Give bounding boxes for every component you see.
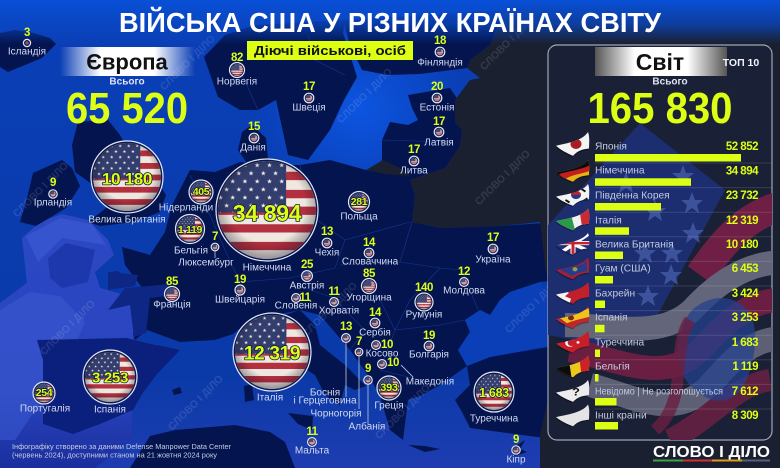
World heading: Світ	[636, 49, 684, 75]
flag: Bahrain	[556, 282, 590, 305]
row: United Kingdom	[554, 231, 758, 259]
row: South Korea	[554, 182, 758, 210]
country: Spain: 3 253	[92, 370, 128, 386]
map: Russia and Belarus dark region	[410, 0, 780, 468]
country: United Kingdom	[88, 141, 166, 226]
row: Unknown: Невідомо | Не розголошується	[595, 386, 723, 398]
World label: Всього	[652, 76, 688, 88]
country: Norway	[217, 52, 257, 88]
country: Bosnia and Herzegovina: 13	[340, 321, 352, 333]
country: Denmark	[240, 121, 266, 154]
country: Austria: 25	[301, 259, 314, 271]
land: Sicily	[288, 413, 313, 430]
country: Portugal: Португалія	[20, 404, 70, 414]
country: Cyprus: 9	[513, 434, 519, 446]
country: Slovenia: Словенія	[275, 300, 317, 312]
panel flag backdrop	[548, 123, 780, 440]
country: Slovakia: 14	[363, 237, 376, 249]
row: Other countries	[556, 404, 758, 430]
country: Estonia: 20	[431, 81, 443, 93]
watermarks: СЛОВО І ДІЛО	[158, 33, 218, 93]
country: Finland: Фінляндія	[417, 58, 463, 68]
row: Japan: Японія	[595, 142, 627, 152]
country: Montenegro	[310, 336, 363, 420]
country: Iceland	[8, 27, 46, 58]
watermarks: СЛОВО І ДІЛО	[11, 160, 71, 220]
country: France	[153, 276, 191, 310]
country: Cyprus	[506, 434, 526, 466]
World number: 165 830	[588, 84, 732, 133]
watermarks: СЛОВО І ДІЛО	[335, 66, 395, 126]
row: Belgium: 1 119	[732, 361, 758, 373]
country: Ireland: 9	[50, 177, 56, 189]
country: Slovakia: Словаччина	[342, 256, 399, 268]
land: North Africa	[130, 425, 295, 468]
country: Czechia: Чехія	[315, 248, 339, 258]
rifle silhouette	[108, 271, 170, 337]
country: Latvia	[424, 116, 454, 148]
flag: Unknown	[556, 380, 589, 403]
country: Spain: Іспанія	[94, 404, 126, 416]
watermarks: СЛОВО І ДІЛО	[373, 382, 433, 442]
watermarks: СЛОВО І ДІЛО	[473, 148, 533, 208]
land: central Europe	[122, 160, 560, 440]
Europe label: Всього	[109, 76, 145, 88]
Europe banner	[60, 47, 195, 76]
land: Iceland	[0, 30, 56, 72]
row: Other countries: 8 309	[732, 410, 758, 422]
top gradient band	[0, 0, 780, 44]
row: Spain: Іспанія	[595, 312, 628, 324]
row: Guam: Гуам (США)	[595, 264, 651, 274]
country: Kosovo: 10	[381, 339, 393, 351]
country: Belgium	[174, 214, 208, 256]
country: Austria	[290, 259, 324, 292]
country: Hungary: 85	[363, 268, 376, 280]
map: Kaliningrad	[366, 160, 410, 176]
row: Turkey: 1 683	[732, 337, 758, 349]
country: Lithuania: Литва	[400, 166, 428, 176]
country: Albania	[349, 363, 385, 432]
country: Moldova	[443, 266, 485, 296]
title: ВІЙСЬКА США У РІЗНИХ КРАЇНАХ СВІТУ	[119, 6, 662, 38]
country: Lithuania	[400, 144, 428, 176]
country: Kosovo: Косово	[366, 348, 399, 360]
country: Montenegro: Чорногорія	[310, 408, 362, 420]
country: Hungary	[346, 268, 392, 304]
country: Netherlands: Нідерланди	[159, 202, 213, 214]
country: Norway: 82	[231, 52, 243, 64]
map: land	[0, 10, 560, 468]
land: Turkey	[455, 345, 560, 440]
land: Iberia	[37, 338, 180, 434]
row: Germany: Німеччина	[595, 166, 645, 176]
country: Finland: 18	[434, 35, 447, 47]
country: Bosnia and Herzegovina	[293, 321, 357, 406]
row: Turkey: Туреччина	[595, 338, 645, 348]
country: Netherlands	[159, 180, 213, 214]
country: Ukraine	[475, 232, 511, 266]
row: Turkey	[554, 329, 758, 357]
country: Moldova: 12	[458, 266, 470, 278]
country: Estonia	[420, 81, 454, 114]
country: Switzerland: Швейцарія	[215, 294, 265, 306]
map: borders	[127, 35, 478, 385]
country: Croatia	[319, 286, 359, 316]
country: Germany: 34 894	[233, 200, 302, 226]
country: Ukraine: Україна	[475, 254, 511, 266]
country: Romania: 140	[415, 282, 433, 294]
country: Estonia: Естонія	[420, 102, 454, 114]
country: Belgium: 1 119	[178, 224, 203, 236]
country: Malta	[295, 426, 330, 456]
flag: Guam	[556, 258, 590, 280]
country: Montenegro: 7	[356, 336, 362, 348]
row: Belgium: Бельгія	[595, 362, 630, 372]
land: Baltics	[368, 88, 462, 180]
row: Bahrain: 3 424	[732, 288, 759, 300]
row: United Kingdom: Велика Британія	[595, 240, 674, 250]
land: Denmark	[238, 125, 268, 165]
country: Norway: Норвегія	[217, 76, 257, 88]
row: Unknown: 7 612	[732, 386, 758, 398]
country: Greece: Греція	[374, 400, 404, 412]
source note: Інфографіку створено за даними Defense Manpower Data Center	[12, 442, 232, 451]
row: Germany: 34 894	[726, 166, 759, 178]
country: Romania	[406, 282, 442, 320]
country: Spain	[83, 350, 137, 416]
row: Italy	[554, 207, 758, 235]
country: North Macedonia	[378, 357, 454, 388]
World banner	[595, 47, 727, 76]
map: Black Sea	[458, 282, 552, 366]
country: Slovenia	[275, 292, 317, 312]
land: Great Britain	[72, 120, 166, 226]
country: Iceland: 3	[24, 27, 30, 39]
source note: (червень 2024), доступними станом на 21 жовтня 2024 року	[12, 450, 217, 460]
country: Slovakia	[342, 237, 399, 268]
country: Sweden: 17	[303, 81, 315, 93]
country: Netherlands: 405	[193, 186, 210, 198]
country: Germany	[216, 159, 318, 274]
country: Bulgaria: 19	[423, 330, 435, 342]
flag: Spain	[556, 306, 590, 330]
flag: Japan	[556, 132, 590, 157]
country: Poland	[340, 192, 378, 222]
country: Italy: Італія	[257, 392, 283, 404]
country: United Kingdom: Велика Британія	[88, 214, 166, 226]
country: Austria: Австрія	[290, 280, 324, 292]
country: Serbia	[359, 307, 391, 338]
country: Serbia: Сербія	[359, 326, 391, 338]
source note	[12, 442, 232, 460]
country: Bosnia and Herzegovina: Боснія	[310, 388, 340, 398]
country: Latvia: Латвія	[424, 138, 454, 148]
country: Italy	[233, 313, 311, 404]
country: Serbia: 14	[369, 307, 382, 319]
soldier silhouette	[0, 214, 135, 468]
panel: world top 10	[548, 45, 780, 440]
country: Romania: Румунія	[406, 310, 442, 320]
panel: Europe total	[60, 47, 195, 133]
country: Finland	[417, 35, 463, 68]
country: Malta: Мальта	[295, 446, 330, 456]
country: Sweden	[292, 81, 326, 114]
watermarks: СЛОВО І ДІЛО	[300, 280, 360, 340]
country: Greece: 393	[380, 382, 398, 394]
country: Denmark: Данія	[240, 142, 266, 154]
country: Luxembourg: 7	[212, 231, 218, 243]
row: South Korea: Південна Корея	[595, 190, 670, 202]
country: Germany: Німеччина	[243, 262, 292, 274]
country: Moldova: Молдова	[443, 286, 485, 296]
watermarks: СЛОВО І ДІЛО	[478, 13, 538, 73]
country: Denmark: 15	[248, 121, 261, 133]
flag: Belgium	[556, 356, 590, 378]
country: Ireland: Ірландія	[34, 198, 72, 208]
flag: United Kingdom	[556, 233, 590, 256]
country: Croatia: 11	[328, 286, 341, 298]
row: Other countries: Інші країни	[595, 410, 647, 422]
panel background	[548, 45, 772, 440]
country: Bulgaria: Болгарія	[409, 350, 449, 360]
flag: Italy	[556, 208, 590, 232]
row: Germany	[556, 160, 758, 186]
subtitle badge: Діючі військові, осіб	[254, 44, 406, 58]
row: Bahrain: Бахрейн	[595, 288, 635, 300]
country: Latvia: 17	[433, 116, 445, 128]
row: Italy: Італія	[595, 216, 622, 226]
country: North Macedonia: Македонія	[406, 376, 454, 388]
panel divider lines	[595, 163, 772, 409]
country: Albania: Албанія	[349, 420, 385, 432]
land: Cyprus	[510, 440, 527, 456]
land: Scandinavia	[204, 20, 357, 160]
country: France: Франція	[153, 300, 191, 310]
country: Hungary: Угорщина	[346, 292, 392, 304]
country: France: 85	[166, 276, 179, 288]
row: Guam: 6 453	[732, 263, 758, 275]
country: Iceland: Ісландія	[8, 46, 46, 58]
logo: СЛОВО І ДІЛО	[653, 444, 770, 461]
row: Japan: 52 852	[726, 141, 758, 153]
country: Bulgaria	[409, 330, 449, 360]
land: Finland	[343, 10, 505, 75]
country: Malta: 11	[306, 426, 319, 438]
country: Albania: 9	[365, 363, 371, 375]
country: Switzerland	[215, 274, 265, 306]
country: Italy: 12 319	[244, 344, 300, 364]
country: Bosnia and Herzegovina: і Герцеговина	[293, 396, 357, 406]
subtitle badge	[247, 41, 413, 60]
watermarks: СЛОВО І ДІЛО	[503, 276, 563, 336]
country: Czechia	[315, 226, 339, 258]
country: Sweden: Швеція	[292, 102, 326, 114]
row: South Korea: 23 732	[726, 190, 758, 202]
country: Kosovo	[366, 339, 399, 360]
country: Lithuania: 17	[408, 144, 420, 156]
country: Luxembourg	[178, 231, 234, 268]
flag: Other	[556, 404, 589, 428]
row: Bahrain	[554, 280, 759, 308]
flag: Germany	[556, 160, 590, 183]
row: Spain: 3 253	[732, 312, 758, 324]
land: Ireland	[20, 160, 80, 226]
row: Japan	[554, 130, 758, 162]
Europe number: 65 520	[66, 84, 188, 133]
watermarks: СЛОВО І ДІЛО	[38, 298, 98, 358]
flag: Unknown: ?	[572, 385, 580, 398]
country: Poland: 281	[351, 196, 368, 208]
country: Croatia: Хорватія	[319, 306, 359, 316]
country: Luxembourg: Люксембург	[178, 256, 234, 268]
country: Ukraine: 17	[487, 232, 499, 244]
country: Turkey: Туреччина	[470, 414, 519, 424]
country: North Macedonia: 10	[387, 357, 399, 369]
country: Portugal	[20, 382, 70, 414]
country: Belgium: Бельгія	[174, 246, 208, 256]
row: Belgium	[554, 354, 758, 382]
row: Spain	[554, 305, 758, 332]
land: Sardinia and Corsica	[172, 384, 254, 402]
country: Greece	[374, 376, 404, 412]
Baltic sea highlight	[250, 15, 470, 205]
row: Guam	[554, 256, 758, 284]
country: Switzerland: 19	[234, 274, 246, 286]
country: United Kingdom: 10 180	[102, 170, 152, 188]
country: Turkey	[470, 372, 519, 424]
Europe heading: Європа	[86, 50, 169, 74]
country: Czechia: 13	[321, 226, 333, 238]
Top 10 label: ТОП 10	[723, 57, 759, 69]
watermarks: СЛОВО І ДІЛО	[166, 373, 226, 433]
flag: Turkey	[556, 331, 590, 354]
country: Poland: Польща	[340, 212, 378, 222]
country: Cyprus: Кіпр	[506, 454, 526, 466]
flag: South Korea	[556, 184, 590, 207]
land: Crete	[408, 445, 440, 452]
country: Turkey: 1 683	[479, 386, 509, 400]
country: Ireland	[34, 177, 72, 208]
country: Slovenia: 11	[299, 292, 312, 304]
row: Italy: 12 319	[726, 215, 758, 227]
watermarks	[11, 13, 563, 442]
row: United Kingdom: 10 180	[726, 239, 758, 251]
country: Portugal: 254	[36, 387, 53, 399]
land: Italy	[240, 310, 366, 405]
row: Unknown	[556, 380, 758, 406]
